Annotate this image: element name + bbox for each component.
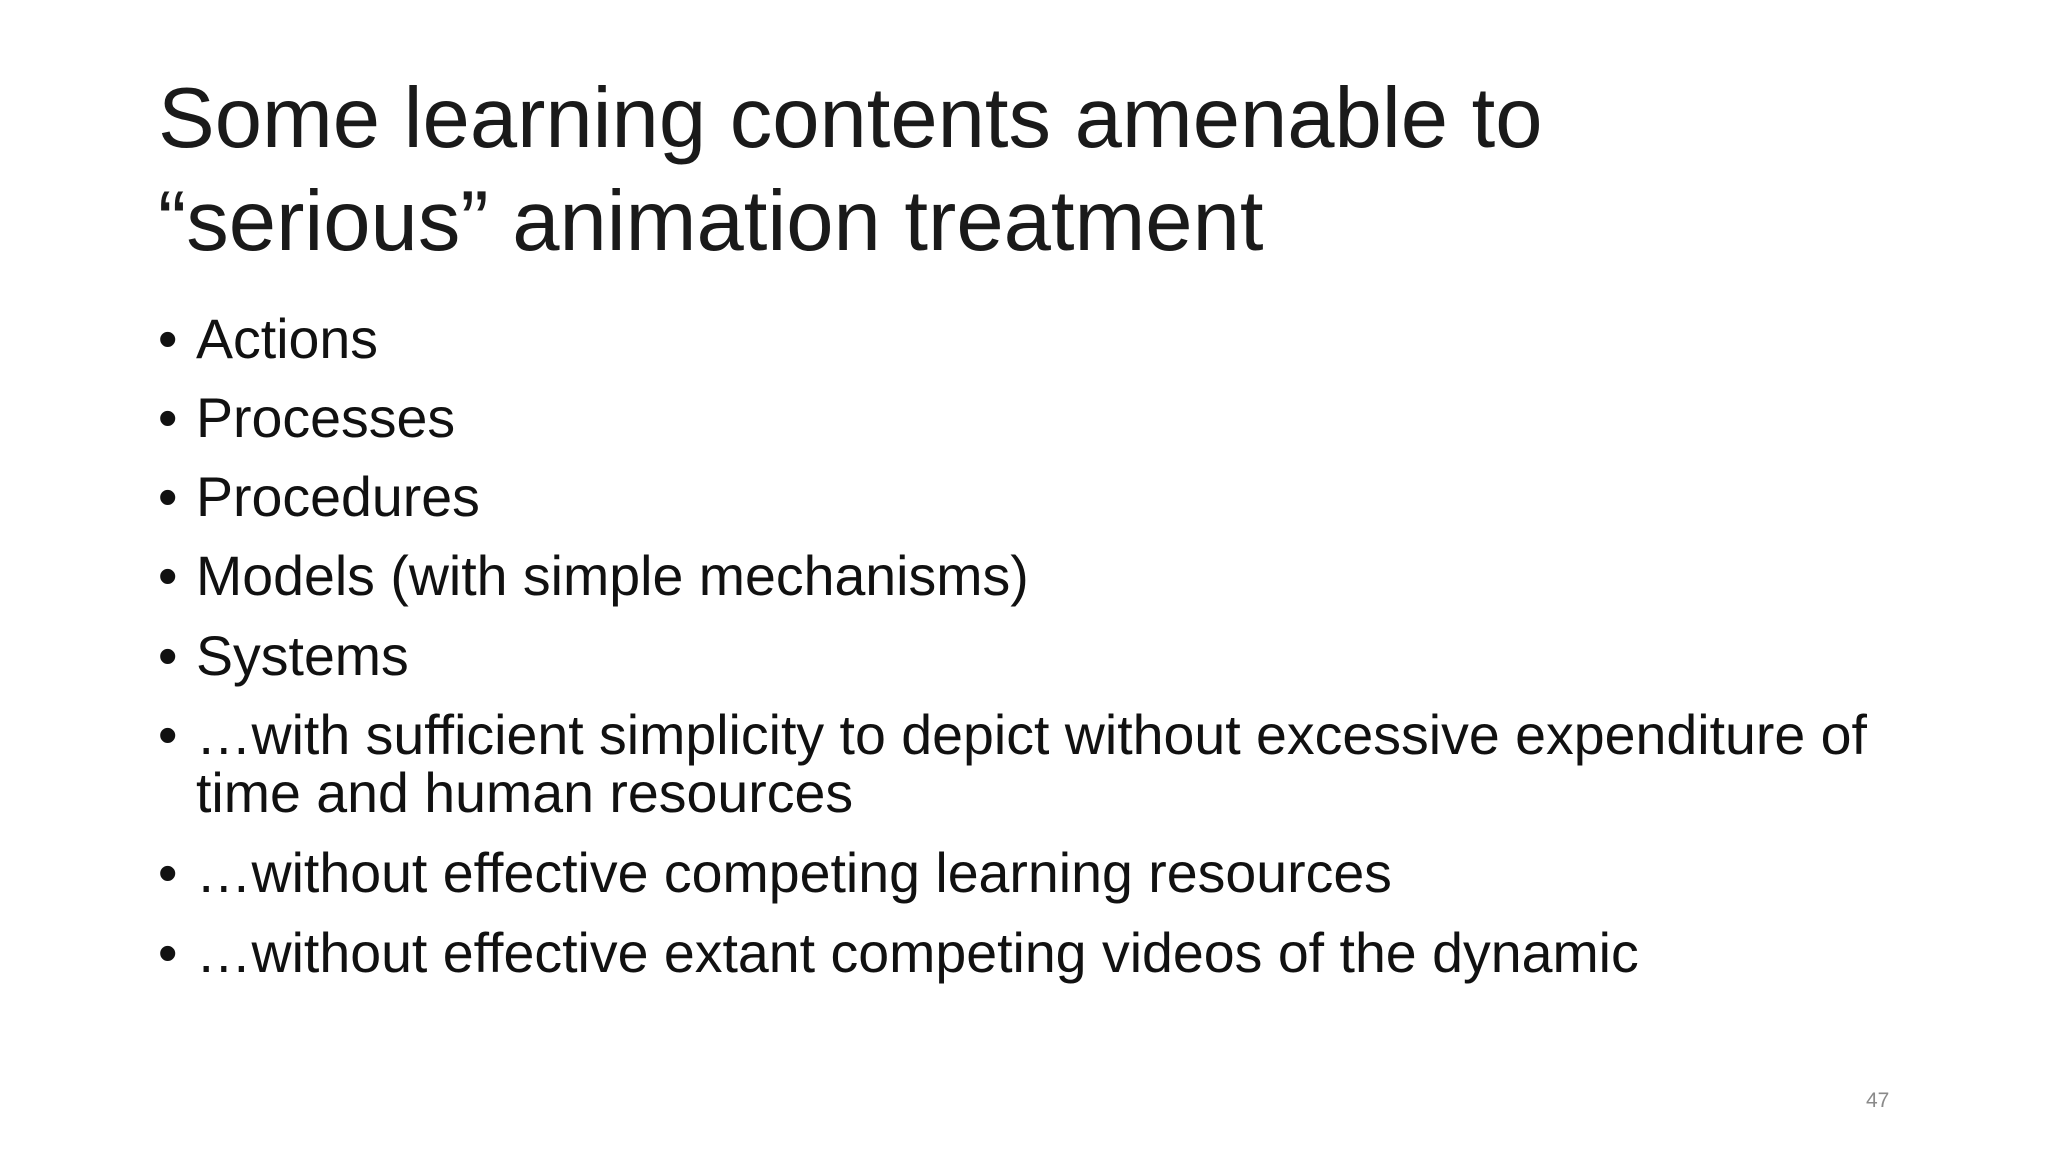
bullet: procedures: • xyxy=(158,466,177,528)
bullet: sufficient simplicity: …with sufficient simplicity to depict without excessive expenditure of xyxy=(196,704,1867,766)
title xyxy=(158,71,1542,269)
bullet: models: • xyxy=(158,545,177,607)
bullet: competing learning resources: • xyxy=(158,842,177,904)
bullet: actions: • xyxy=(158,308,177,370)
bullet: sufficient simplicity xyxy=(158,704,1867,824)
page number: 47 xyxy=(1866,1089,1889,1112)
title: Some learning contents amenable to xyxy=(158,71,1542,166)
bullet: processes: • xyxy=(158,387,177,449)
bullet: competing videos: • xyxy=(158,922,177,984)
bullet: procedures: Procedures xyxy=(196,466,480,528)
bullet: actions: Actions xyxy=(196,308,378,370)
bullet: competing learning resources: …without effective competing learning resources xyxy=(196,842,1392,904)
bullet: sufficient simplicity: time and human resources xyxy=(196,762,853,824)
bullet: competing videos: …without effective extant competing videos of the dynamic xyxy=(196,922,1639,984)
title: “serious” animation treatment xyxy=(158,174,1263,269)
bullet list xyxy=(158,308,1867,984)
bullet: sufficient simplicity: • xyxy=(158,704,177,766)
bullet: systems: Systems xyxy=(196,625,409,687)
bullet: processes: Processes xyxy=(196,387,455,449)
bullet: models: Models (with simple mechanisms) xyxy=(196,545,1029,607)
bullet: systems: • xyxy=(158,625,177,687)
